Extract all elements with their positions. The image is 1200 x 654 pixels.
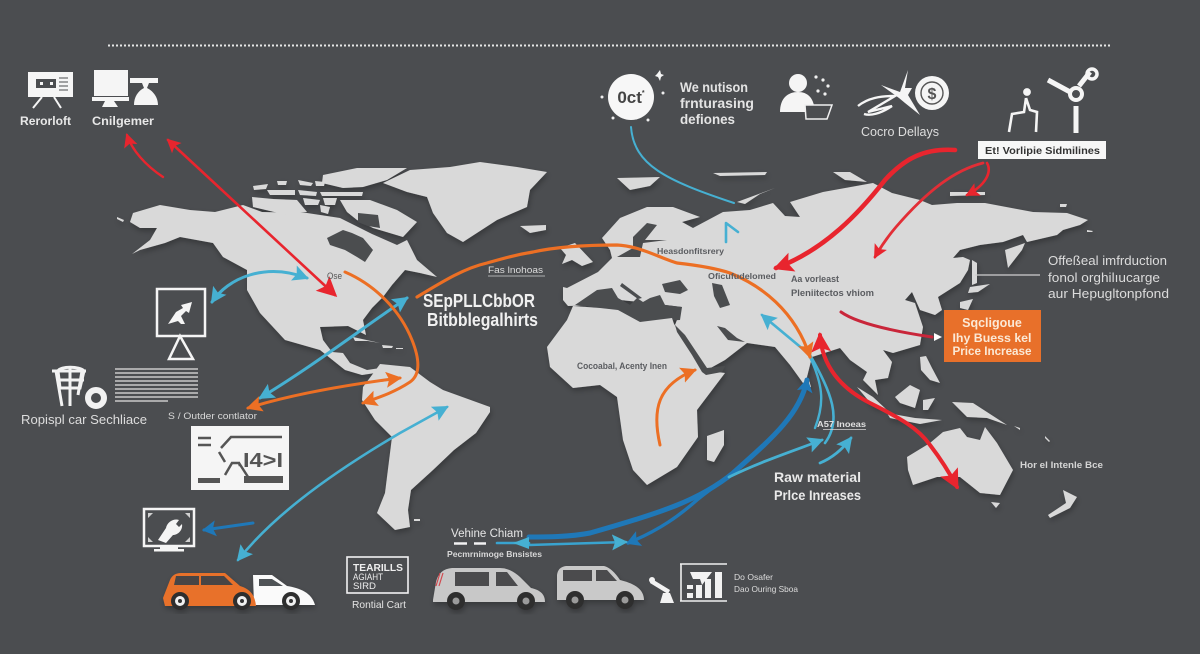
decorative dashes group [454,542,486,545]
arrowhead: teal pointing left [513,537,529,549]
label: cargo delays: Cocro Dellays [861,124,939,139]
label: signboard caption: Rontial Cart [352,599,406,611]
arrow: orange to Peru [345,272,418,403]
icon: orange car and white truck [163,573,315,610]
panel: small signboard: SIRD [353,581,377,591]
label: North America note: Ose [327,271,342,281]
label: Asia note: Pleniitectos vhiom [791,288,874,298]
heading: raw material price increases [774,469,861,503]
label: left icon two: Cnilgemer [92,114,154,128]
arrow: thick blue [529,380,807,537]
callout: orange price increase: Sqcligoue [962,316,1022,330]
arrow: red to orange callout [841,312,932,337]
icon: cart and wheel [52,367,104,406]
label: chart caption one: Do Osafer [734,572,773,582]
arrow: red to Siberia [875,163,983,257]
arrow: red hook [967,163,989,195]
map: Red Sea and Gulf of Aden [675,325,725,375]
arrow: teal inner [810,357,821,428]
map: South America [362,364,490,530]
callout: orange price increase [934,310,1041,362]
icon: date badge: 0ct [617,88,642,107]
icon: date badge: * [642,90,645,97]
callout: orange price increase: Ihy Buess kel [952,333,1032,345]
map: Africa [547,306,725,485]
label: cart and service: Ropispl car Sechliace [21,412,147,427]
label: vehicle chain: Vehine Chiam [451,528,523,540]
text: right description: aur Hepugltonpfond [1048,286,1169,301]
map: Eurasia [563,183,1088,395]
leader line [975,274,1040,276]
text: right description: Offeßeal imfrduction [1048,253,1167,268]
text: right description [1048,253,1169,301]
map: islands of the world [117,172,1093,521]
arrow: teal horizontal lower [497,542,626,545]
icon: aircraft and dollar coin: $ [928,86,937,103]
arrow: long orange to India [417,245,810,357]
world map [117,162,1093,530]
icon: growth bar chart [680,564,727,601]
dotted header rule [108,44,1112,46]
text: top description: defiones [680,112,735,127]
arrow: teal from date badge [631,127,734,203]
arrow: teal small [820,438,851,463]
arrow: teal to India [762,315,834,443]
label: counter: S / Outder contlator [168,411,257,421]
arrow: teal chevron [726,223,738,242]
heading: central supply chain title [423,291,538,330]
icon: presentation board [28,72,73,108]
arrows [127,127,989,560]
icon: robot arm [649,577,674,603]
label: Europe note two: Oficufudelomed [708,271,776,281]
text lines block [115,369,198,401]
arrow: orange in Africa [657,370,695,445]
panel: small signboard: AGIAHT [353,572,383,582]
label: chart caption two: Dao Ouring Sboa [734,584,798,594]
text: right description: fonol orghilıucarge [1048,270,1160,285]
arrow: orange double [248,378,400,408]
heading: central supply chain title: Bitbblegalhirts [427,310,538,330]
arrow: red double to Australia [820,335,957,487]
map: Greenland [383,162,547,242]
icon: seated figure [1009,89,1037,132]
text: top description [680,80,754,127]
heading: raw material price increases: Prlce Inreases [774,487,861,503]
label: Asia note [791,274,874,298]
arrow: teal double over North America [212,272,307,302]
text: top description: frnturasing [680,96,754,111]
panel: white diagram card: I4>I [243,450,283,472]
label: ocean note with underline: A57 Inoeas [817,419,866,429]
label: Oceania note: Hor el Intenle Bce [1020,460,1103,471]
map: Mediterranean, Black Sea, Caspian, Baltic and gulfs [575,223,745,342]
map: North America [130,205,437,375]
arrow: red short curve [127,135,163,177]
icon: aircraft and dollar coin [858,70,949,115]
icon: person with folder [780,74,832,119]
arrow: red to north America [168,140,335,295]
heading: central supply chain title: SEpPLLCbbOR [423,291,535,311]
icon: framed display with vehicle [157,289,205,359]
icon: grey van [557,566,644,609]
label: Africa note: Cocoabal, Acenty Inen [577,361,667,372]
arrow: red thick to Russia [776,150,955,268]
arrow: blue short [204,523,253,530]
icon: wind turbine wrench [1048,69,1097,133]
panel: small signboard [347,557,408,593]
arrow: long teal [260,298,407,398]
text: top description: We nutison [680,80,748,95]
label: fast notes with underline: Fas lnohoas [488,265,544,275]
map: Australia [907,427,1013,495]
label: vehicle chain subtitle: Pecmrnimoge Bnsistes [447,549,542,559]
icon: grey minivan [433,568,545,610]
icon: date badge [600,70,664,122]
map: Arctic islands [252,168,417,237]
arrow: teal to raw material [729,440,822,477]
label: left icon one: Rerorloft [20,114,71,128]
arrow: teal across South America [238,407,447,560]
icon: monitor with tool [144,509,194,552]
panel: small signboard: TEARILLS [353,563,403,574]
heading: raw material price increases: Raw material [774,469,861,485]
callout: multiple schedules box: Et! Vorlipie Sidmilines [985,145,1100,157]
callout: orange price increase: Price Increase [952,346,1032,358]
label: Asia note: Aa vorleast [791,274,839,284]
map: Hudson Bay and Foxe Basin [327,213,380,262]
arrow: second blue [628,477,729,543]
label: Europe note one: Heasdonfitsrery [657,246,724,256]
panel: white diagram card [191,426,289,490]
callout: multiple schedules box [978,141,1106,159]
icon: monitor and lamp [92,70,158,107]
